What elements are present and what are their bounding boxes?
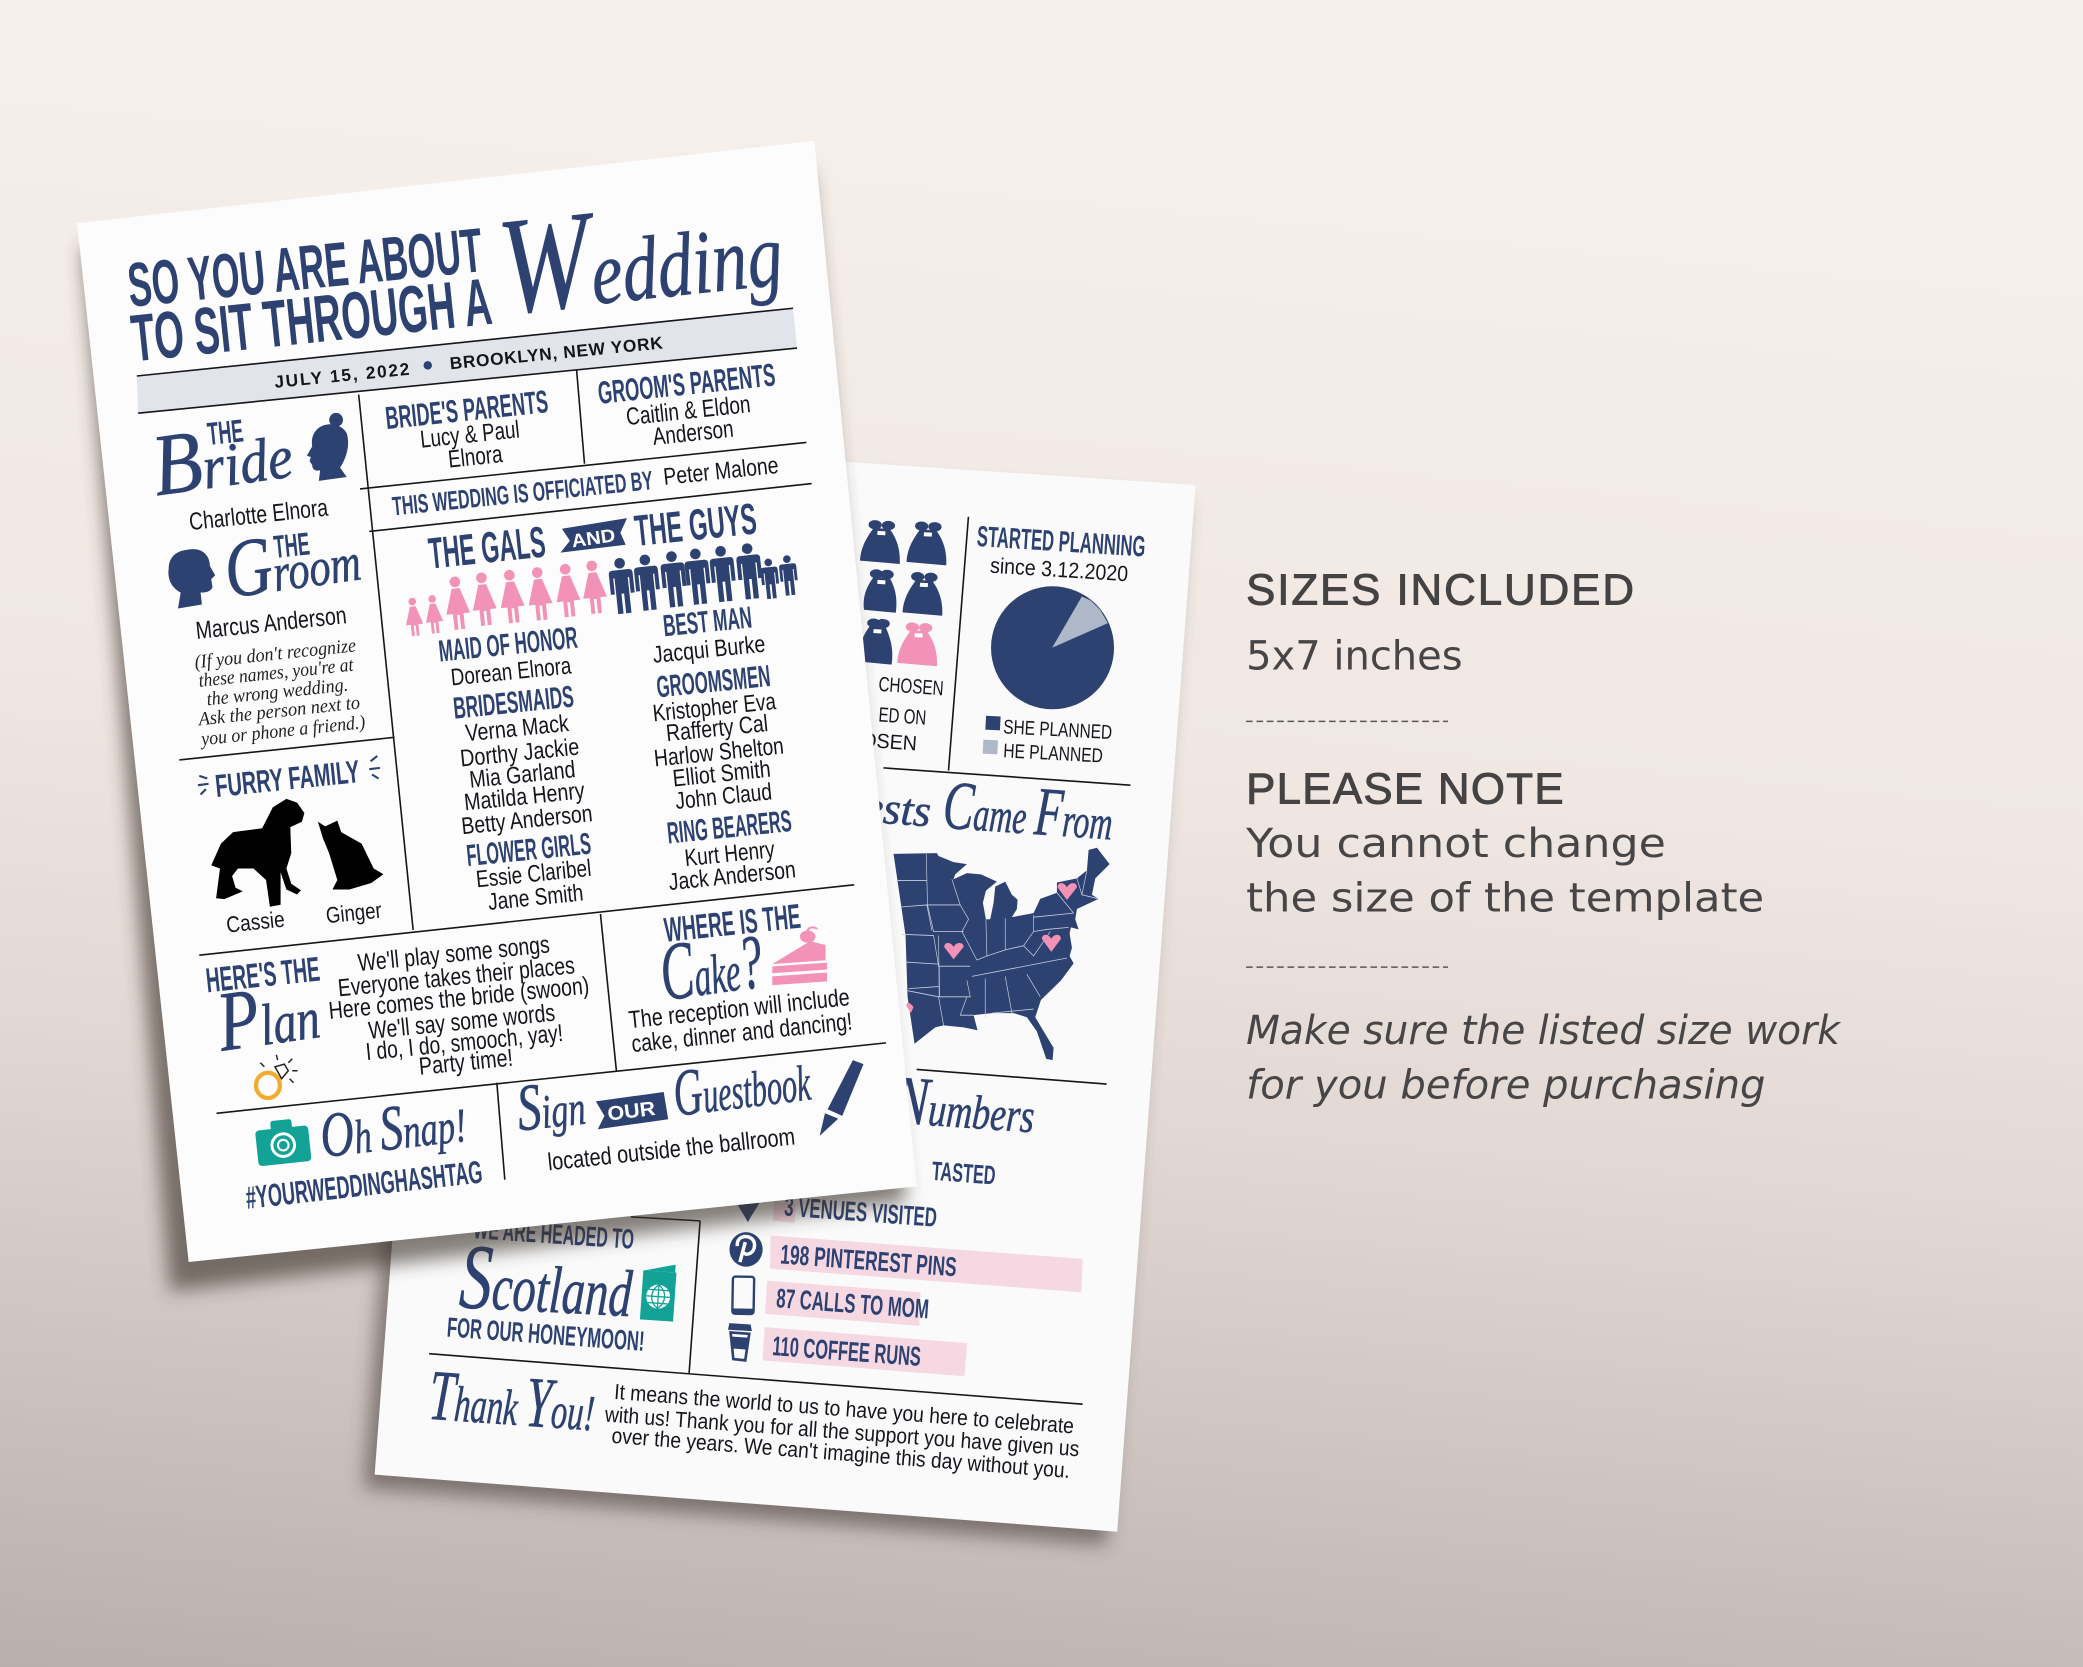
section: sign our guestbook: OUR	[606, 1098, 657, 1126]
section: the bride	[146, 399, 348, 536]
text: purchase reminder	[1246, 1008, 1842, 1109]
column: guys names	[651, 601, 797, 896]
icon: bride silhouette	[307, 413, 348, 481]
icons: bridal party figures	[403, 542, 799, 637]
text: aside in italic: Ask the person next to	[196, 692, 361, 731]
text: plan list: Party time!	[418, 1045, 514, 1081]
icon: coffee cup	[728, 1323, 752, 1360]
stat: calls to mom	[765, 1281, 930, 1326]
pie chart: she planned vs he planned	[991, 586, 1114, 709]
text: thank you message: It means the world to us to have you here to celebrate	[613, 1379, 1075, 1438]
paper: front card	[77, 141, 917, 1262]
text: plan list: Here comes the bride (swoon)	[327, 973, 590, 1025]
map: eastern united states	[894, 848, 1110, 1060]
panel: back card	[375, 436, 1196, 1532]
section: groom's parents: Anderson	[651, 416, 735, 451]
icon: passport	[640, 1262, 677, 1322]
stat: calls to mom: 87 CALLS TO MOM	[775, 1282, 930, 1324]
section: the bride: Charlotte Elnora	[188, 495, 330, 536]
section: groom's parents	[596, 356, 777, 451]
section: oh snap: Oh Snap!	[316, 1084, 470, 1171]
section: furry family: FURRY FAMILY	[214, 753, 361, 804]
section: where is the cake: The reception will include	[627, 984, 851, 1034]
icon: fountain pen	[820, 1060, 863, 1136]
icon: pinterest	[729, 1232, 763, 1267]
section: sign our guestbook	[513, 1042, 863, 1176]
stat: coffee runs	[763, 1327, 967, 1376]
text: aside in italic: the wrong wedding.	[206, 675, 349, 710]
legend: she planned	[985, 716, 1113, 744]
section: sign our guestbook: Guestbook	[669, 1042, 815, 1131]
column: guys names: RING BEARERS	[665, 804, 793, 851]
section: here's the plan: Plan	[211, 963, 324, 1070]
column: guys names: BEST MAN	[661, 601, 753, 643]
section: oh snap: #YOURWEDDINGHASHTAG	[244, 1154, 484, 1216]
section: groom's parents: GROOM'S PARENTS	[596, 356, 777, 411]
section: oh snap	[244, 1084, 484, 1216]
icon: cake slice	[772, 927, 827, 985]
column: guys names: Kurt Henry	[683, 836, 776, 872]
section: groom's parents: Caitlin & Eldon	[625, 391, 752, 431]
column: guys names: Rafferty Cal	[665, 710, 769, 747]
section: furry family	[198, 753, 383, 938]
section: the groom: Marcus Anderson	[194, 602, 348, 645]
column: guys names: Jack Anderson	[667, 856, 797, 896]
icons: wedding party outfits	[859, 519, 948, 666]
text: outfit caption: OSEN	[860, 729, 918, 755]
heading: guests came from: Guests	[791, 759, 934, 841]
text: outfit caption: ED ON	[878, 703, 927, 730]
text: size value: 5x7 inches	[1246, 634, 1463, 680]
heading: sizes included: SIZES INCLUDED	[1246, 565, 1634, 614]
column: gals names: Jane Smith	[487, 879, 585, 916]
text: aside in italic: you or phone a friend.)	[198, 712, 366, 750]
column: gals names: FLOWER GIRLS	[465, 827, 593, 873]
section: where is the cake	[627, 898, 854, 1058]
section: the groom: Groom	[218, 507, 365, 616]
text: plan list: I do, I do, smooch, yay!	[365, 1020, 564, 1066]
column: gals names: BRIDESMAIDS	[452, 680, 575, 726]
legend: she planned: SHE PLANNED	[1003, 716, 1113, 744]
front card shadow	[82, 173, 906, 1291]
heading: the gals and the guys	[426, 494, 759, 579]
section: where is the cake: cake, dinner and dancing!	[630, 1008, 854, 1058]
text: note body: You cannot change	[1245, 821, 1666, 867]
panel: sizes note	[1245, 565, 1842, 1109]
section: where is the cake: WHERE IS THE	[662, 898, 802, 950]
text: tasted: TASTED	[931, 1156, 997, 1191]
column: guys names: Elliot Smith	[671, 756, 772, 792]
section: bride's parents: BRIDE'S PARENTS	[384, 383, 550, 436]
column: guys names: GROOMSMEN	[655, 659, 772, 704]
stat: coffee runs: 110 COFFEE RUNS	[771, 1330, 922, 1372]
text: plan list: We'll say some words	[367, 1000, 556, 1045]
text: thank you message: with us! Thank you for all the support you have given us	[603, 1401, 1080, 1461]
stat: venues visited	[773, 1191, 938, 1233]
script: thank you: Thank You!	[427, 1355, 598, 1446]
text: plan list	[327, 931, 590, 1081]
text: for our honeymoon: FOR OUR HONEYMOON!	[446, 1312, 646, 1357]
text: officiant: Peter Malone	[662, 452, 780, 491]
heading: numbers: Numbers	[891, 1061, 1038, 1147]
section: furry family: Cassie	[225, 907, 286, 938]
section: where is the cake: Cake?	[654, 914, 768, 1018]
section: sign our guestbook: Sign	[513, 1066, 588, 1145]
text: aside in italic	[194, 635, 366, 750]
heading: please note: PLEASE NOTE	[1246, 765, 1564, 814]
column: gals names: Betty Anderson	[460, 800, 594, 840]
text: officiant: THIS WEDDING IS OFFICIATED BY	[391, 465, 654, 521]
text: note body	[1245, 821, 1764, 921]
icon: groom silhouette	[168, 549, 215, 608]
heading: the gals and the guys: THE GALS	[426, 518, 548, 579]
stat: pinterest pins: 198 PINTEREST PINS	[779, 1238, 958, 1282]
icon: camera	[254, 1117, 312, 1166]
section: the groom: THE	[272, 525, 311, 565]
icon: location pin	[732, 1179, 764, 1222]
section: bride's parents	[384, 383, 550, 474]
legend: he planned	[983, 740, 1103, 767]
banner: date and place	[137, 308, 797, 413]
text: purchase reminder: Make sure the listed size work	[1246, 1008, 1842, 1054]
section: the bride: THE	[206, 412, 245, 452]
banner: date and place: BROOKLYN, NEW YORK	[449, 332, 664, 373]
paper: back card	[375, 436, 1196, 1532]
column: guys names: Jacqui Burke	[651, 631, 767, 669]
title: TO SIT THROUGH A	[128, 265, 495, 376]
back card shadow	[364, 452, 1185, 1545]
column: gals names: Essie Claribel	[475, 855, 593, 893]
text: thank you message	[603, 1379, 1080, 1483]
heading: guests came from	[791, 759, 1116, 854]
column: guys names: Harlow Shelton	[653, 732, 785, 773]
text: outfit caption: CHOSEN	[878, 673, 944, 700]
text: outfit caption	[860, 673, 944, 755]
heading: guests came from: Came From	[941, 766, 1116, 854]
title: SO YOU ARE ABOUT	[125, 215, 486, 321]
text: plan list: We'll play some songs	[357, 931, 551, 977]
icon: diamond ring	[256, 1055, 298, 1098]
column: guys names: Kristopher Eva	[651, 688, 778, 727]
column: gals names: Mia Garland	[468, 756, 577, 794]
section: sign our guestbook: located outside the ballroom	[546, 1124, 796, 1176]
column: gals names	[437, 621, 594, 916]
section: bride's parents: Lucy & Paul	[419, 416, 521, 454]
section: bride's parents: Elnora	[447, 441, 504, 474]
text: note body: the size of the template	[1246, 875, 1764, 921]
text: thank you message: over the years. We can't imagine this day without you.	[611, 1423, 1071, 1483]
text: aside in italic: these names, you're at	[198, 655, 355, 692]
heading: started planning: STARTED PLANNING	[976, 521, 1146, 564]
stat: venues visited: 3 VENUES VISITED	[783, 1191, 938, 1233]
column: gals names: Verna Mack	[464, 710, 570, 747]
title: Wedding	[492, 162, 788, 343]
text: purchase reminder: for you before purchasing	[1246, 1063, 1766, 1109]
banner: date and place: JULY 15, 2022	[273, 359, 410, 392]
heading: the gals and the guys: THE GUYS	[632, 494, 759, 556]
script: scotland: Scotland	[457, 1225, 636, 1337]
column: gals names: Dorthy Jackie	[459, 734, 581, 773]
column: gals names: Matilda Henry	[463, 777, 586, 816]
text: we are headed to: WE ARE HEADED TO	[473, 1213, 635, 1255]
legend: he planned: HE PLANNED	[1003, 740, 1103, 767]
title	[125, 162, 788, 376]
section: furry family: Ginger	[325, 898, 383, 928]
column: gals names: MAID OF HONOR	[437, 621, 579, 669]
section: here's the plan: HERE'S THE	[204, 951, 322, 1000]
text: plan list: Everyone takes their places	[337, 952, 576, 1002]
column: guys names: John Claud	[674, 778, 773, 815]
section: the bride: Bride	[146, 399, 298, 514]
section: here's the plan	[204, 931, 590, 1098]
panel: front card	[77, 141, 917, 1262]
text: aside in italic: (If you don't recognize	[194, 635, 357, 673]
section: the groom	[168, 507, 365, 645]
column: gals names: Dorean Elnora	[450, 652, 573, 691]
icons: dog and cat silhouettes	[211, 799, 383, 907]
heading: the gals and the guys: AND	[570, 524, 617, 551]
text: since date: since 3.12.2020	[989, 553, 1129, 586]
icon: phone	[732, 1276, 754, 1314]
